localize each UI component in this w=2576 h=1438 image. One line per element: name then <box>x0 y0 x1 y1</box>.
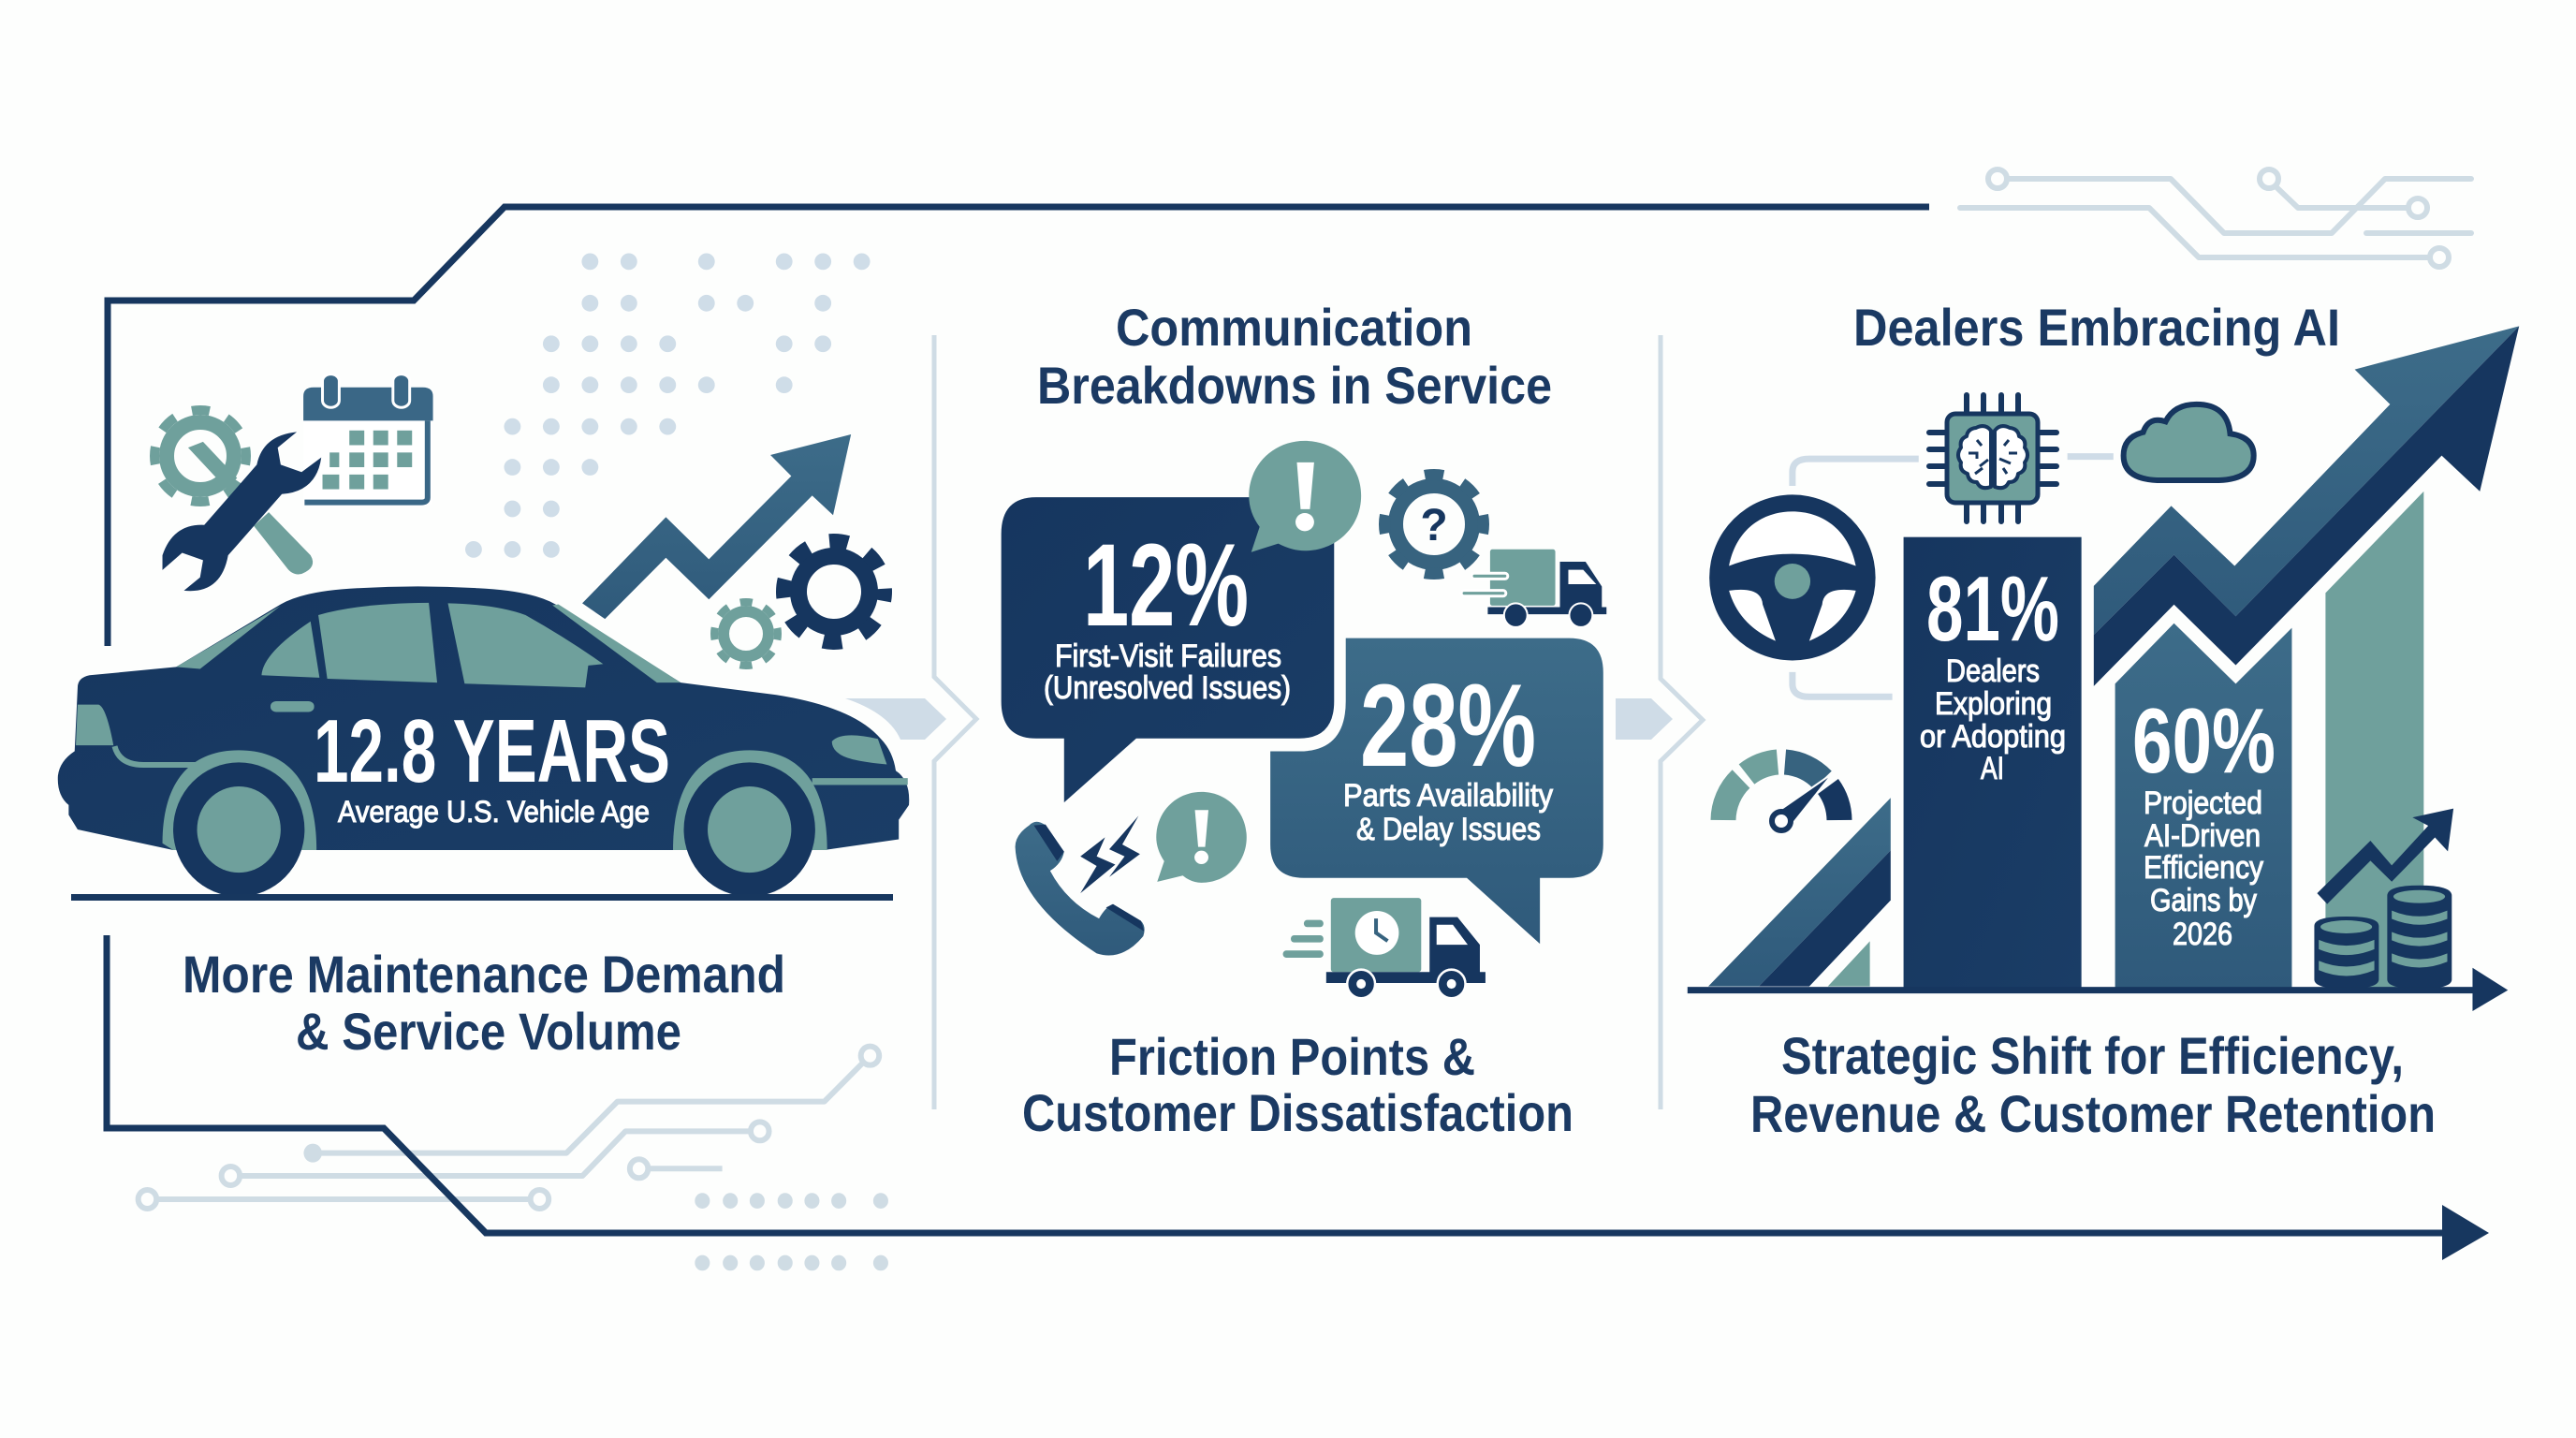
stat: 81% dealers <box>1920 557 2066 786</box>
bar: 81% <box>1904 537 2082 989</box>
heading: maintenance demand <box>183 945 785 1061</box>
callout: 28% parts availability: 28% <box>1360 661 1536 791</box>
callout: 28% parts availability <box>1270 638 1603 944</box>
divider with chevron: panels 1 and 2 <box>934 335 976 1109</box>
icon: calendar <box>303 374 433 506</box>
bar: teal growth <box>2325 492 2423 989</box>
icon: cloud <box>2124 404 2254 480</box>
stat: 60% efficiency: 60% <box>2132 689 2276 792</box>
icon: alert bubble top <box>1249 441 1361 552</box>
stat: 81% dealers: Dealers <box>1946 653 2040 689</box>
circuit decoration: top right <box>1960 169 2471 267</box>
icon: coin stacks <box>2314 886 2452 989</box>
stat: 60% efficiency: 2026 <box>2173 917 2232 952</box>
icon: wrench and screwdriver <box>163 432 321 591</box>
icon: delivery truck with clock <box>1283 898 1486 998</box>
heading: friction points <box>1022 1027 1573 1142</box>
dot grid decoration <box>465 253 871 558</box>
callout: 12% first-visit failures: First-Visit Failures <box>1055 638 1281 674</box>
heading: friction points: Friction Points & <box>1109 1027 1475 1086</box>
stat: 81% dealers: Exploring <box>1935 686 2052 722</box>
icon: question gear: ? <box>1420 501 1448 550</box>
icon: small growth arrow <box>2317 809 2453 904</box>
flow arrow: panels 2 to 3 <box>1616 698 1673 740</box>
stat: 60% efficiency: Efficiency <box>2144 850 2263 886</box>
stat: 60% efficiency: Gains by <box>2150 883 2257 918</box>
stat: 81% dealers: 81% <box>1926 557 2059 660</box>
heading: maintenance demand: & Service Volume <box>296 1002 681 1061</box>
stat: 60% efficiency: Projected <box>2144 785 2262 821</box>
icon: alert bubble bottom <box>1156 792 1247 883</box>
circuit decoration: bottom left <box>139 1047 888 1270</box>
callout: 12% first-visit failures <box>1002 497 1334 802</box>
icon: small teal gear <box>714 602 778 666</box>
divider with chevron: panels 2 and 3 <box>1661 335 1703 1109</box>
heading: maintenance demand: More Maintenance Demand <box>183 945 785 1004</box>
heading: friction points: Customer Dissatisfaction <box>1022 1083 1573 1142</box>
icon: question gear <box>1384 475 1484 574</box>
stat: 81% dealers: or Adopting <box>1920 719 2066 755</box>
stat: 12.8 years <box>314 701 670 829</box>
heading: communication breakdowns: Communication <box>1116 298 1472 357</box>
chart: rising bars and arrow <box>1688 326 2519 1011</box>
flow arrow: panels 1 to 2 <box>845 698 946 740</box>
stat: 60% efficiency <box>2132 689 2276 952</box>
callout: 12% first-visit failures: (Unresolved Issues) <box>1044 670 1291 706</box>
heading: dealers embracing AI: Dealers Embracing AI <box>1853 298 2340 357</box>
heading: strategic shift: Strategic Shift for Efficiency, <box>1781 1026 2404 1085</box>
callout: 12% first-visit failures: 12% <box>1083 521 1249 651</box>
stat: 81% dealers: AI <box>1981 751 2004 786</box>
icon: phone with static <box>1016 815 1145 955</box>
icon: delivery truck top <box>1461 550 1606 627</box>
stat: 60% efficiency: AI-Driven <box>2144 818 2261 854</box>
icon: rising arrow <box>582 434 851 619</box>
icon: AI chip with brain <box>1929 395 2056 521</box>
panel: vehicle age <box>58 374 909 1061</box>
frame: lower outline with arrow <box>107 935 2489 1260</box>
icon: navy gear <box>783 541 885 642</box>
icon: speedometer gauge <box>1723 762 1839 830</box>
panel: dealers embracing AI <box>1688 298 2519 1143</box>
chart baseline axis <box>1688 968 2508 1011</box>
frame: upper outline <box>108 207 1929 646</box>
arrow: large rising trend <box>2094 326 2519 686</box>
heading: strategic shift: Revenue & Customer Retention <box>1750 1084 2436 1143</box>
heading: communication breakdowns <box>1037 298 1552 415</box>
chart: lower-left arrow segment <box>1708 798 1891 987</box>
icon: steering wheel <box>1709 494 1876 660</box>
panel: communication breakdowns <box>1002 298 1606 1142</box>
bar: 60% <box>2115 624 2291 989</box>
icon: teal gear <box>154 410 246 502</box>
heading: communication breakdowns: Breakdowns in Service <box>1037 356 1552 415</box>
illustration: car <box>58 586 909 897</box>
connector lines <box>1793 457 2114 697</box>
heading: strategic shift <box>1750 1026 2436 1143</box>
callout: 28% parts availability: Parts Availability <box>1343 778 1553 814</box>
car ground line <box>71 894 893 901</box>
stat: 12.8 years: Average U.S. Vehicle Age <box>338 795 650 829</box>
callout: 28% parts availability: & Delay Issues <box>1356 812 1541 847</box>
stat: 12.8 years: 12.8 YEARS <box>314 701 670 801</box>
